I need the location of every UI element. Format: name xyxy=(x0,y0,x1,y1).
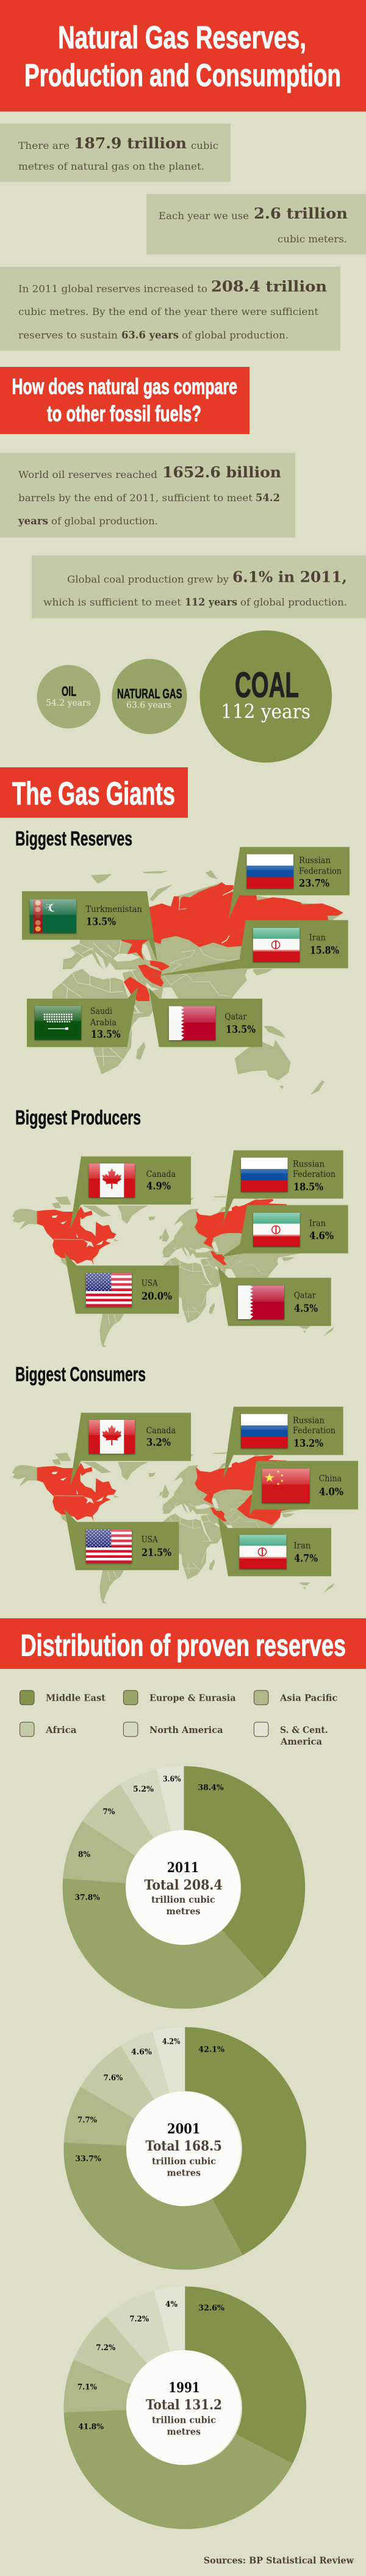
donut chart: 2011: 3.6% xyxy=(163,1775,181,1784)
legend xyxy=(20,1690,337,1747)
callout: canada production: Canada xyxy=(146,1170,176,1179)
text block: oil reserves: of global production. xyxy=(51,515,158,527)
map: biggest reserves xyxy=(52,870,348,1095)
callout: canada consumption: Canada xyxy=(146,1426,176,1436)
legend: America xyxy=(280,1736,322,1747)
subheading: biggest producers: Biggest Producers xyxy=(15,1106,141,1129)
callout: iran reserves xyxy=(154,920,348,976)
callout: usa production: USA xyxy=(142,1279,158,1289)
subheading: biggest reserves: Biggest Reserves xyxy=(15,827,132,850)
australasia xyxy=(235,1026,325,1095)
callout: qatar reserves: Qatar xyxy=(224,1012,247,1022)
flag: qatar xyxy=(169,1006,215,1040)
text block: oil reserves: 54.2 xyxy=(256,492,280,504)
donut chart: 2011: 7% xyxy=(102,1807,115,1817)
donut chart: 2011: 5.2% xyxy=(133,1785,154,1794)
legend: S. & Cent. xyxy=(280,1724,328,1735)
text block: coal production: which is sufficient to meet xyxy=(43,596,182,608)
callout: china consumption: 4.0% xyxy=(319,1486,343,1497)
highlighted countries xyxy=(116,882,343,1001)
text block: 208.4 trillion: 63.6 years xyxy=(121,329,179,341)
callout: canada consumption xyxy=(70,1413,191,1485)
text block: 187.9 trillion: metres of natural gas on the planet. xyxy=(18,161,204,172)
flag: iran xyxy=(253,1213,300,1246)
callout: usa consumption: 21.5% xyxy=(142,1547,171,1558)
callout: usa production xyxy=(65,1253,179,1314)
callout: russian federation production: Russian xyxy=(293,1159,325,1169)
heading: how does natural gas compare: to other fossil fuels? xyxy=(47,401,201,426)
source note: Sources: BP Statistical Review xyxy=(204,2555,354,2566)
bubble: coal xyxy=(200,631,332,762)
callout: canada production xyxy=(70,1156,191,1229)
donut chart: 2001: 33.7% xyxy=(75,2154,102,2163)
donut chart: 1991: 32.6% xyxy=(198,2304,225,2313)
donut chart: 2001: 7.7% xyxy=(77,2116,98,2125)
bubble: oil: 54.2 years xyxy=(46,698,91,708)
callout: turkmenistan reserves xyxy=(22,891,157,963)
callout: qatar production xyxy=(218,1267,331,1326)
donut chart: 2011 xyxy=(74,1775,273,1977)
legend: North America xyxy=(149,1724,223,1735)
callout: canada production: 4.9% xyxy=(146,1181,171,1192)
donut chart: 2011: trillion cubic xyxy=(151,1894,215,1905)
text block: coal production: 6.1% in 2011, xyxy=(232,568,347,586)
map: biggest consumers xyxy=(12,1452,342,1604)
title banner xyxy=(0,0,366,112)
text block: 2.6 trillion: 2.6 trillion xyxy=(254,204,348,222)
donut chart: 1991: 7.1% xyxy=(77,2382,98,2392)
callout: russian federation reserves xyxy=(229,847,350,919)
callout: russian federation consumption: Russian xyxy=(293,1416,325,1425)
text block: 187.9 trillion xyxy=(0,123,231,182)
callout: iran consumption: 4.7% xyxy=(294,1553,318,1565)
text block: coal production xyxy=(32,555,366,618)
callout: saudi arabia reserves: Arabia xyxy=(90,1018,117,1027)
bubble: natural gas: NATURAL GAS xyxy=(117,686,182,701)
donut chart: 2011: 8% xyxy=(78,1850,91,1859)
callout: turkmenistan reserves: Turkmenistan xyxy=(85,905,142,914)
heading: the gas giants: The Gas Giants xyxy=(12,776,175,812)
callout: russian federation reserves: 23.7% xyxy=(299,878,329,889)
bubble: natural gas: 63.6 years xyxy=(126,701,171,711)
donut chart: 1991: 7.2% xyxy=(96,2343,116,2353)
donut chart: 1991: 4% xyxy=(165,2300,178,2309)
callout: saudi arabia reserves: 13.5% xyxy=(91,1029,121,1040)
callout: iran production: Iran xyxy=(309,1218,326,1228)
legend: Asia Pacific xyxy=(279,1693,337,1704)
donut chart: 2001: trillion cubic xyxy=(152,2155,216,2166)
callout: iran production xyxy=(221,1205,348,1257)
callout: iran consumption: Iran xyxy=(293,1541,311,1551)
donut chart: 1991 xyxy=(77,2300,274,2497)
callout: russian federation consumption: 13.2% xyxy=(293,1438,323,1449)
donut chart: 2001: 42.1% xyxy=(198,2046,225,2055)
flag: turkmenistan xyxy=(30,899,76,933)
callout: qatar reserves xyxy=(149,988,262,1047)
text block: 208.4 trillion: In 2011 global reserves increased to xyxy=(18,283,207,294)
callout: saudi arabia reserves xyxy=(27,987,138,1047)
text block: coal production: 112 years xyxy=(185,596,237,609)
donut chart: 1991: 7.2% xyxy=(129,2315,149,2324)
callout: saudi arabia reserves: Saudi xyxy=(90,1007,113,1016)
text block: 208.4 trillion: of global production. xyxy=(182,329,289,341)
bubble: coal: COAL xyxy=(235,665,299,705)
legend: Europe & Eurasia xyxy=(149,1693,236,1704)
text block: 2.6 trillion xyxy=(146,194,366,255)
heading: how does natural gas compare: How does natural gas compare xyxy=(12,374,237,399)
callout: usa production: 20.0% xyxy=(142,1290,172,1302)
donut chart: 2001: 4.6% xyxy=(131,2047,152,2057)
bubble: oil: OIL xyxy=(62,684,76,699)
callout: iran production: 4.6% xyxy=(309,1230,334,1242)
donut chart: 1991: 41.8% xyxy=(78,2423,104,2432)
text block: 208.4 trillion: 208.4 trillion xyxy=(211,277,327,295)
text block: 208.4 trillion xyxy=(0,267,340,350)
donut chart: 2001: 2001 xyxy=(167,2121,200,2137)
callout: russian federation reserves: Russian xyxy=(299,856,331,866)
donut chart: 1991: metres xyxy=(167,2426,201,2437)
bubble: coal: 112 years xyxy=(221,700,310,723)
text block: 208.4 trillion: cubic metres. By the end of the year there were sufficient xyxy=(18,306,319,317)
donut chart: 1991: 1991 xyxy=(168,2380,200,2396)
donut chart: 2011: 37.8% xyxy=(74,1894,100,1902)
donut chart: 2001: 4.2% xyxy=(162,2038,181,2046)
flag: canada xyxy=(88,1420,135,1454)
callout: russian federation production: 18.5% xyxy=(293,1181,323,1193)
heading: distribution of proven reserves xyxy=(0,1618,366,1669)
donut chart: 2001 xyxy=(75,2038,274,2238)
legend: Middle East xyxy=(46,1693,106,1704)
flag: china xyxy=(262,1469,310,1503)
text block: 187.9 trillion: There are xyxy=(18,140,70,151)
callout: qatar production: Qatar xyxy=(294,1291,316,1301)
map: biggest producers xyxy=(12,1196,342,1347)
flag: iran xyxy=(239,1535,287,1569)
text block: oil reserves xyxy=(0,453,295,538)
callout: iran consumption xyxy=(218,1516,331,1576)
subheading: biggest consumers: Biggest Consumers xyxy=(15,1362,146,1386)
donut chart: 2011: 38.4% xyxy=(198,1784,224,1793)
donut chart: 2011: 2011 xyxy=(167,1860,199,1876)
flag: usa xyxy=(86,1529,132,1563)
flag: russia xyxy=(241,1157,288,1192)
donut chart: 2001: metres xyxy=(167,2167,201,2178)
text block: 187.9 trillion: 187.9 trillion xyxy=(74,134,187,152)
callout: china consumption xyxy=(249,1461,358,1516)
text block: oil reserves: World oil reserves reached xyxy=(18,469,157,480)
flag: saudi arabia xyxy=(35,1006,81,1040)
donut chart: 2011: Total 208.4 xyxy=(144,1878,223,1894)
callout: canada consumption: 3.2% xyxy=(146,1437,171,1449)
text block: oil reserves: years xyxy=(18,515,48,527)
text block: 2.6 trillion: cubic meters. xyxy=(278,233,347,245)
heading: the gas giants xyxy=(0,767,188,818)
callout: qatar reserves: 13.5% xyxy=(226,1024,256,1035)
text block: coal production: Global coal production grew by xyxy=(67,574,229,585)
callout: russian federation production xyxy=(223,1150,343,1223)
text block: 208.4 trillion: reserves to sustain xyxy=(18,329,118,341)
callout: russian federation consumption: Federation xyxy=(293,1426,336,1436)
donut chart: 1991: trillion cubic xyxy=(152,2415,216,2426)
heading: how does natural gas compare xyxy=(0,367,249,434)
callout: iran reserves: Iran xyxy=(309,933,326,943)
flag: russia xyxy=(241,1414,288,1448)
legend: Africa xyxy=(45,1724,77,1735)
text block: oil reserves: 1652.6 billion xyxy=(162,463,281,481)
flag: canada xyxy=(88,1163,135,1198)
flag: russia xyxy=(246,854,293,888)
callout: iran reserves: 15.8% xyxy=(310,945,339,957)
text block: 2.6 trillion: Each year we use xyxy=(159,210,249,222)
donut chart: 2011: metres xyxy=(166,1906,200,1917)
callout: russian federation consumption xyxy=(223,1406,343,1479)
text block: coal production: of global production. xyxy=(240,596,347,608)
flag: iran xyxy=(253,928,300,962)
callout: usa consumption: USA xyxy=(142,1535,158,1545)
donut chart: 1991: Total 131.2 xyxy=(146,2397,222,2413)
flag: usa xyxy=(86,1273,132,1307)
callout: turkmenistan reserves: 13.5% xyxy=(86,916,116,928)
donut chart: 2001: 7.6% xyxy=(104,2074,123,2083)
callout: russian federation production: Federation xyxy=(293,1170,336,1179)
callout: china consumption: China xyxy=(319,1474,342,1484)
flag: qatar xyxy=(238,1286,284,1319)
donut chart: 2001: Total 168.5 xyxy=(145,2138,222,2154)
text block: 187.9 trillion: cubic xyxy=(191,140,218,151)
callout: russian federation reserves: Federation xyxy=(299,866,342,876)
bubble: oil xyxy=(37,665,100,728)
callout: usa consumption xyxy=(65,1510,179,1570)
callout: qatar production: 4.5% xyxy=(294,1303,318,1314)
text block: oil reserves: barrels by the end of 2011, sufficient to meet xyxy=(18,492,253,504)
bubble: natural gas xyxy=(112,659,187,734)
